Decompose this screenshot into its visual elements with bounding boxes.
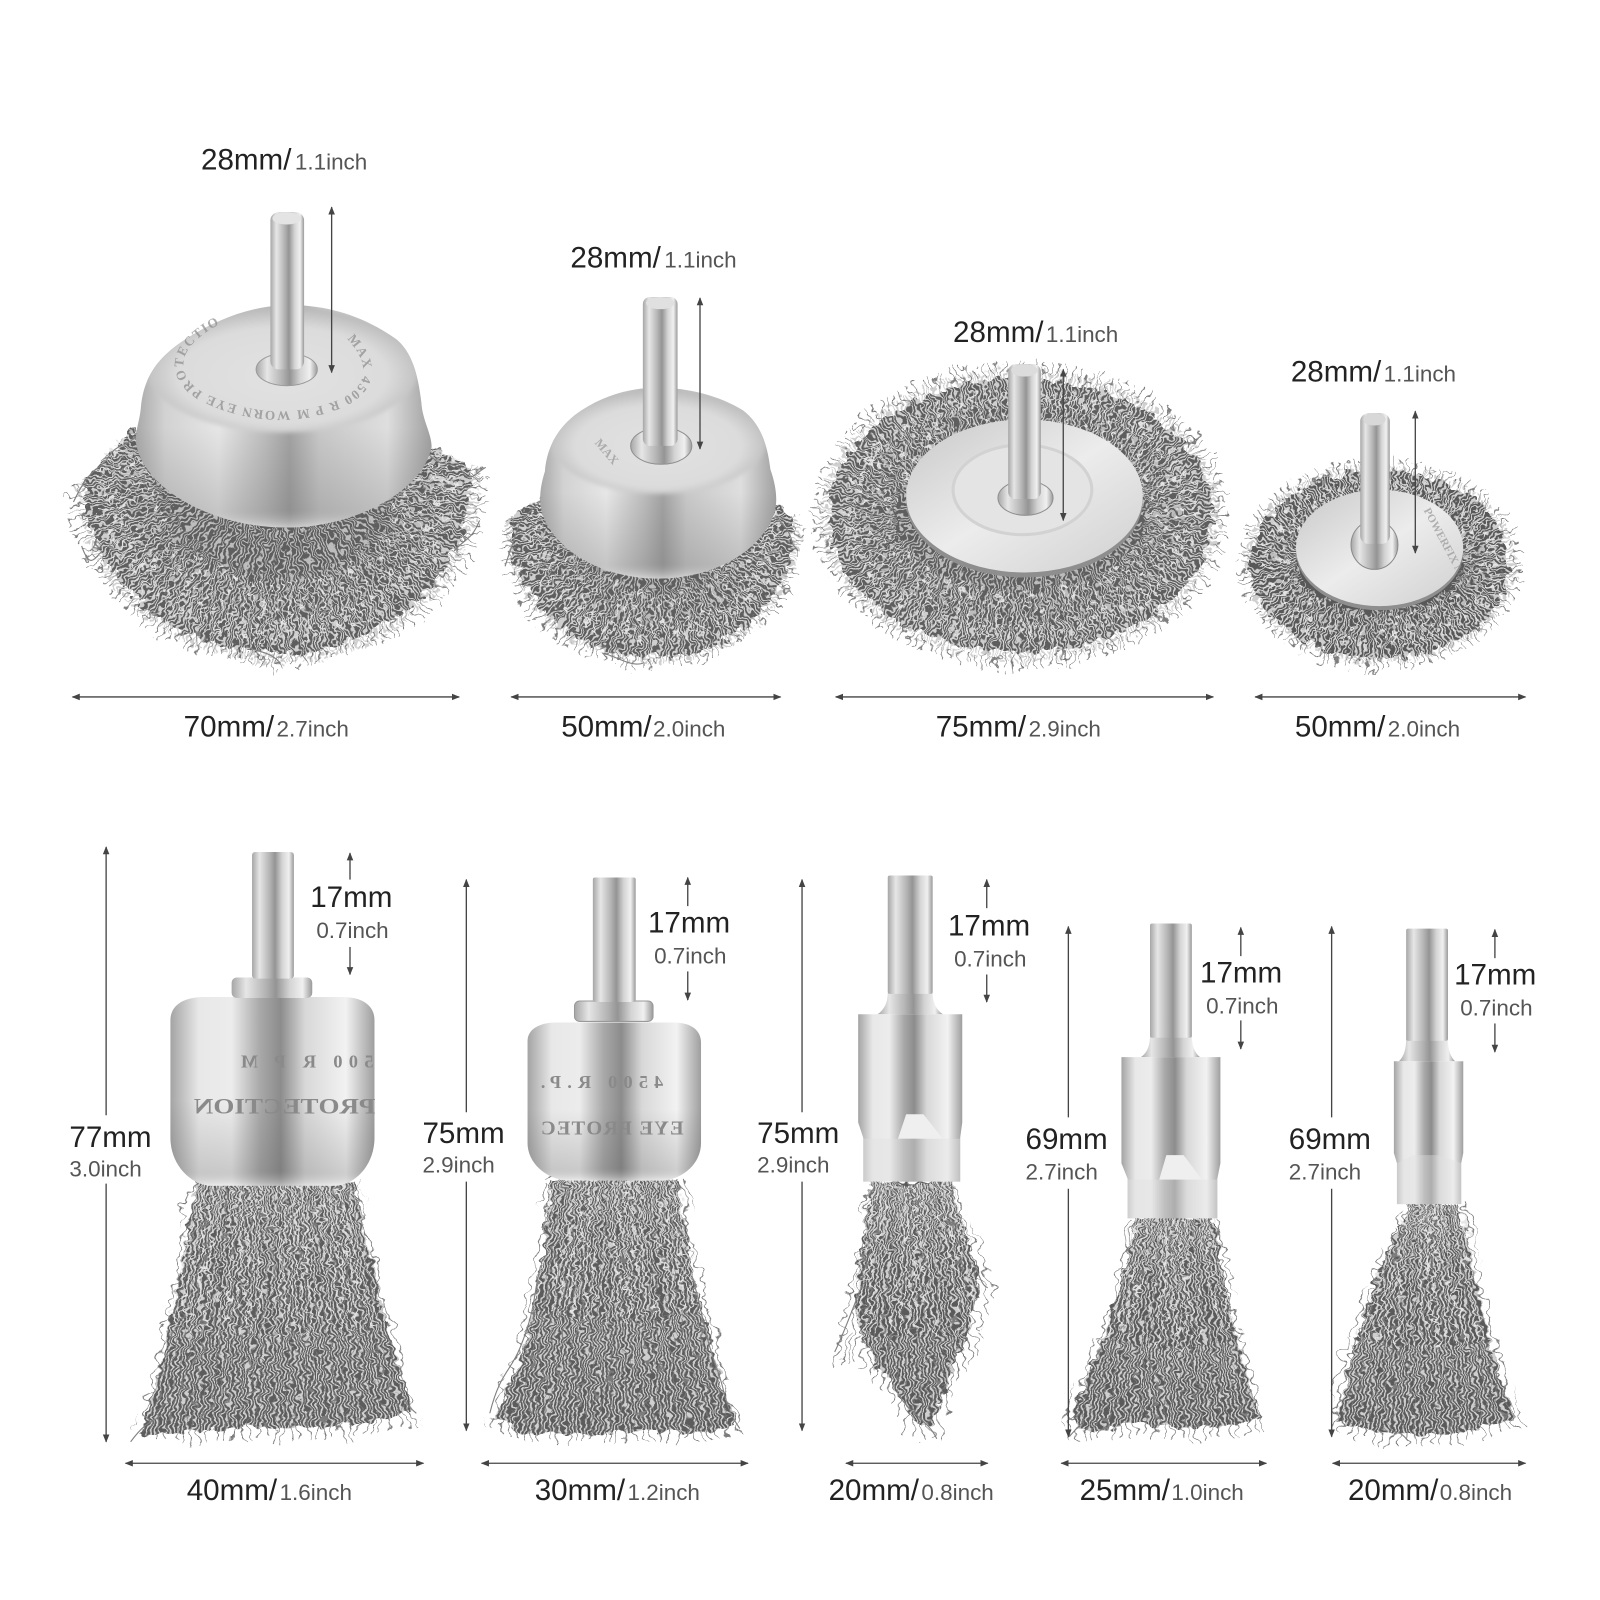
cup lower shading [540,388,776,579]
dimension: 69mm height, brush 9 [1289,927,1371,1437]
cup body [136,305,432,528]
dimension: 40mm width, brush 5: 40mm/ [187,1474,278,1507]
shaft tip [1363,413,1386,426]
dimension: 50mm width, brush 4: 2.0inch [1388,717,1460,742]
dimension: 70mm width, brush 1 [72,697,459,744]
dimension: 28mm shaft, brush 2: 28mm/ [570,241,662,274]
dimension: 75mm width, brush 3 [836,697,1213,744]
dimension: 30mm width, brush 6: 30mm/ [535,1474,626,1507]
dimension: 75mm height, brush 7 [757,880,839,1431]
dimension: 69mm height, brush 8: 2.7inch [1026,1160,1098,1185]
dimension: 20mm width, brush 9: 20mm/ [1348,1474,1439,1507]
shaft tip [1011,364,1038,377]
dimension: 77mm height, brush 5 [69,847,152,1442]
disc shadow edge [1296,492,1463,610]
shaft [270,212,304,369]
shaft [252,852,294,979]
shaft [1008,364,1041,499]
dimension: 28mm shaft, brush 4: 28mm/ [1291,356,1382,389]
hex flat [1128,1180,1217,1218]
collar [574,1001,653,1021]
dimension: 75mm height, brush 6: 2.9inch [422,1152,495,1177]
hex highlight [1159,1155,1202,1180]
dimension: 28mm shaft, brush 1: 1.1inch [295,149,367,174]
engraved RPM: 500 R P M [241,1051,373,1071]
dimension: 17mm shaft, brush 8 [1200,928,1282,1049]
disc [906,419,1143,572]
wire bristles [63,427,490,676]
dimension: 69mm height, brush 9: 69mm [1289,1123,1371,1156]
dimension: 75mm width, brush 3: 2.9inch [1029,717,1101,742]
collar [631,428,692,464]
cup top face [147,306,418,433]
dimension: 28mm shaft, brush 2 [570,241,737,449]
dimension: 69mm height, brush 8 [1026,927,1108,1437]
dimension: 40mm width, brush 5 [126,1463,423,1507]
brush 3: large wheel brush [818,364,1222,662]
dimension: 50mm width, brush 2: 2.0inch [653,717,725,742]
shaft flare [1399,1039,1455,1061]
body [1121,1057,1220,1218]
dimension: 20mm width, brush 9 [1333,1463,1526,1507]
shaft [1360,413,1390,544]
dimension: 20mm width, brush 9: 0.8inch [1440,1480,1512,1505]
brush 4: small wheel brush [1243,413,1516,664]
cup top face [550,388,766,494]
wire bristles [832,1182,999,1443]
wire bristles [500,496,806,674]
shaft tip [272,212,301,224]
dimension: 25mm width, brush 8: 1.0inch [1171,1480,1244,1505]
dimension: 75mm height, brush 6 [422,880,505,1431]
body [858,1014,962,1182]
hex flat [1397,1155,1461,1204]
dimension: 28mm shaft, brush 3: 1.1inch [1046,322,1118,347]
wire bristles [1243,464,1516,664]
dimension: 17mm shaft, brush 7: 0.7inch [954,946,1026,971]
hex highlight [898,1114,943,1139]
brush 1: large cup brush [63,212,490,676]
dimension: 20mm width, brush 7: 20mm/ [829,1474,920,1507]
shaft [1150,923,1192,1038]
collar [232,978,312,998]
dimension: 69mm height, brush 9: 2.7inch [1289,1160,1361,1185]
shaft [888,876,933,994]
dimension: 50mm width, brush 4 [1255,697,1526,744]
engraved RPM: 4500 R.P. [541,1072,663,1092]
shaft [1406,929,1448,1041]
dimension: 28mm shaft, brush 1: 28mm/ [201,143,292,176]
hex flat [863,1139,960,1182]
dimension: 70mm width, brush 1: 70mm/ [184,711,275,744]
engraved lettering: MAX [592,436,622,467]
dimension: 28mm shaft, brush 4: 1.1inch [1384,362,1456,387]
dimension: 75mm height, brush 7: 2.9inch [757,1152,830,1177]
dimension: 70mm width, brush 1: 2.7inch [277,717,349,742]
body [1394,1061,1463,1204]
dimension: 17mm shaft, brush 7 [948,880,1030,1002]
brush 2: small cup brush [505,297,800,664]
dimension: 17mm shaft, brush 8: 17mm [1200,957,1282,990]
wire bristles [130,1179,423,1448]
dimension: 50mm width, brush 4: 50mm/ [1295,711,1386,744]
dimension: 30mm width, brush 6: 1.2inch [628,1480,700,1505]
shaft flare [1141,1036,1200,1057]
dimension: 77mm height, brush 5: 3.0inch [69,1157,142,1182]
dimension: 77mm height, brush 5: 77mm [69,1121,152,1154]
cup lower shading [170,997,374,1186]
dimension: 17mm shaft, brush 9: 17mm [1454,959,1536,992]
brush 5: large end brush [130,852,423,1448]
shaft flare [878,993,943,1014]
dimension: 50mm width, brush 2 [511,697,781,744]
collar [998,481,1053,515]
dimension: 69mm height, brush 8: 69mm [1026,1123,1108,1156]
dimension: 17mm shaft, brush 5: 17mm [310,881,392,914]
wire bristles [1061,1218,1264,1444]
dimension: 28mm shaft, brush 1 [201,143,367,372]
cup body [170,997,374,1186]
disc shadow edge [906,422,1143,578]
dimension: 30mm width, brush 6 [482,1463,748,1507]
cup lower shading [528,1022,701,1181]
disc [1296,490,1463,606]
dimension: 17mm shaft, brush 7: 17mm [948,910,1030,943]
dimension: 17mm shaft, brush 8: 0.7inch [1206,993,1278,1018]
dimension: 17mm shaft, brush 6: 0.7inch [654,943,726,968]
disc lettering: POWERFIX MAX [1421,506,1474,592]
brush 8: 25mm end brush [1061,924,1264,1444]
collar [1351,520,1398,569]
dimension: 75mm width, brush 3: 75mm/ [936,711,1027,744]
brush 6: medium end brush [484,878,744,1446]
dimension: 28mm shaft, brush 2: 1.1inch [664,247,737,272]
shaft tip [646,297,674,309]
brush 7: pointed end brush [832,876,999,1443]
dimension: 17mm shaft, brush 5: 0.7inch [316,918,389,943]
dimension: 20mm width, brush 7: 0.8inch [921,1480,994,1505]
dimension: 28mm shaft, brush 4 [1291,356,1456,553]
shaft [593,878,636,1002]
dimension: 17mm shaft, brush 6: 17mm [648,907,730,940]
cup body [528,1022,701,1181]
dimension: 17mm shaft, brush 5 [310,853,392,974]
cup body [540,388,776,579]
disc hub ring [953,445,1092,535]
dimension: 75mm height, brush 7: 75mm [757,1117,839,1150]
dimension: 20mm width, brush 7 [829,1463,994,1507]
dimension: 25mm width, brush 8 [1061,1463,1266,1507]
engraved PROTECTION: EYE PROTEC [541,1118,684,1140]
dimension: 17mm shaft, brush 9 [1454,930,1536,1052]
shaft [643,297,678,446]
engraved PROTECTION: PROTECTION [194,1093,376,1118]
wire bristles [1330,1202,1528,1449]
collar [256,353,317,386]
dimension: 28mm shaft, brush 3: 28mm/ [953,316,1044,349]
dimension: 40mm width, brush 5: 1.6inch [280,1480,352,1505]
dimension: 17mm shaft, brush 6 [648,878,730,1000]
cup lower shading [136,305,432,528]
dimension: 75mm height, brush 6: 75mm [422,1117,505,1150]
dimension: 28mm shaft, brush 3 [953,316,1118,520]
wire bristles [484,1176,744,1446]
dimension: 17mm shaft, brush 9: 0.7inch [1460,995,1533,1020]
wire bristles [818,368,1222,662]
dimension: 50mm width, brush 2: 50mm/ [561,711,652,744]
dimension: 25mm width, brush 8: 25mm/ [1080,1474,1171,1507]
brush 9: 20mm end brush [1330,928,1528,1449]
